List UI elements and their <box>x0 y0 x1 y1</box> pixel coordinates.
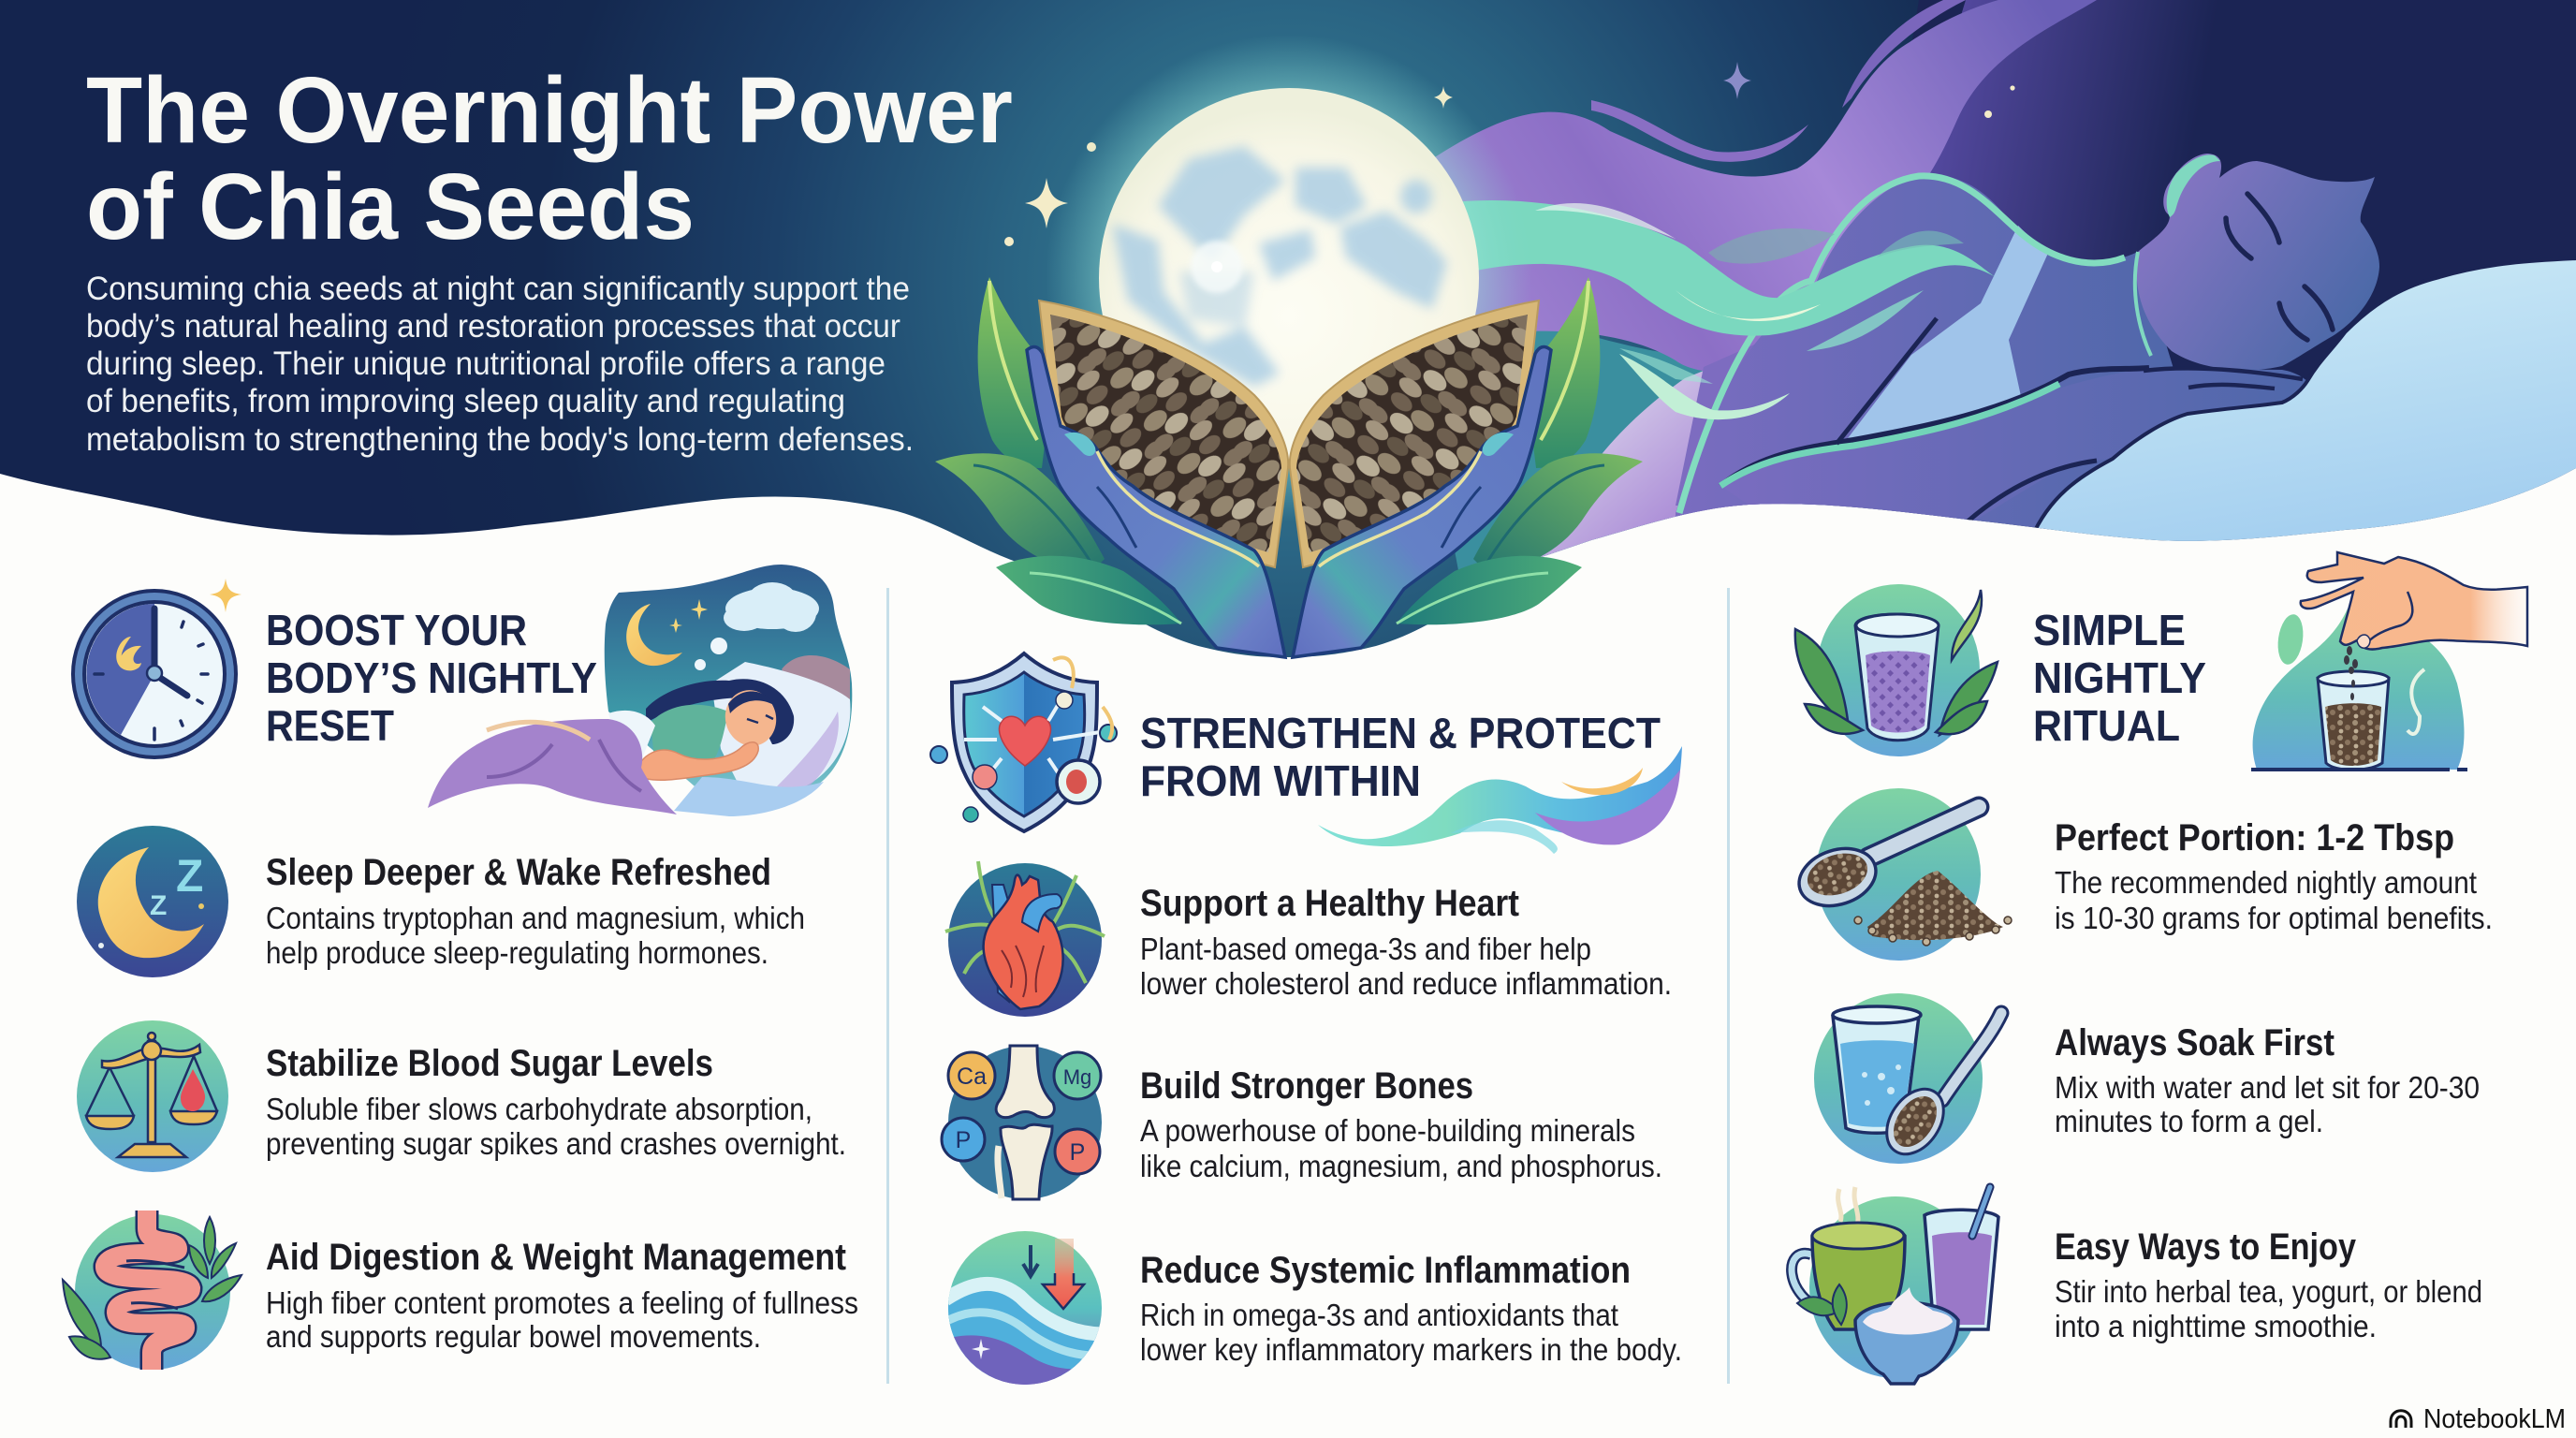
benefit: digestion <box>63 1211 858 1370</box>
decorative ribbon wave <box>1318 746 1682 854</box>
benefit: blood sugar <box>77 1020 846 1172</box>
benefit: stronger bones: Mg <box>1063 1065 1091 1089</box>
column divider left <box>886 588 889 1384</box>
step: easy ways to enjoy: Easy Ways to Enjoy <box>2055 1226 2357 1268</box>
benefit: sleep deeper: Z <box>150 890 167 921</box>
benefit: reduce inflammation: Reduce Systemic Inflammation <box>1140 1250 1631 1291</box>
icon: day night clock <box>73 579 242 757</box>
stars and dots <box>1004 62 2015 246</box>
section heading: NIGHTLY <box>2033 653 2206 702</box>
benefit: stronger bones: like calcium, magnesium, and phosphorus. <box>1140 1149 1662 1183</box>
section heading: SIMPLE <box>2033 606 2186 654</box>
step: easy ways to enjoy: Stir into herbal tea, yogurt, or blend <box>2055 1274 2482 1309</box>
column divider right <box>1727 588 1730 1384</box>
step: perfect portion: Perfect Portion: 1-2 Tbsp <box>2055 817 2454 858</box>
benefit: sleep deeper: Sleep Deeper & Wake Refreshed <box>266 852 771 893</box>
benefit: healthy heart: Support a Healthy Heart <box>1140 883 1519 924</box>
step: always soak first: Mix with water and let sit for 20-30 <box>2055 1070 2480 1105</box>
benefit: sleep deeper: help produce sleep-regulating hormones. <box>266 935 768 970</box>
panel: hero header <box>0 0 2576 665</box>
section heading: RITUAL <box>2033 701 2180 750</box>
illustration: full moon <box>1046 35 1532 521</box>
step: easy ways to enjoy <box>1792 1187 2482 1384</box>
section heading: BODY’S NIGHTLY <box>266 653 597 702</box>
benefit: sleep deeper <box>77 826 805 977</box>
intro paragraph: Consuming chia seeds at night can significantly support the <box>86 271 910 307</box>
title: of Chia Seeds <box>86 154 695 259</box>
step: always soak first <box>1814 993 2480 1165</box>
benefit: stronger bones: Ca <box>957 1064 987 1090</box>
section heading <box>2033 606 2206 750</box>
panel: simple nightly ritual <box>1792 552 2527 1384</box>
section heading: FROM WITHIN <box>1140 756 1421 805</box>
step: perfect portion <box>1792 788 2493 961</box>
section heading: STRENGTHEN & PROTECT <box>1140 709 1661 757</box>
illustration: hands holding chia seed pods <box>935 277 1643 657</box>
benefit: sleep deeper: Z <box>176 852 203 902</box>
benefit: reduce inflammation: lower key inflammatory markers in the body. <box>1140 1332 1682 1367</box>
intro paragraph <box>86 271 914 458</box>
intro paragraph: during sleep. Their unique nutritional profile offers a range <box>86 345 886 382</box>
benefit: healthy heart: Plant-based omega-3s and fiber help <box>1140 932 1591 966</box>
step: perfect portion: The recommended nightly amount <box>2055 865 2477 900</box>
panel: boost your body's nightly reset <box>63 565 858 1370</box>
icon: chia drink with leaves <box>1795 584 1998 756</box>
benefit: stronger bones: P <box>956 1127 971 1153</box>
step: easy ways to enjoy: into a nighttime smoothie. <box>2055 1309 2377 1343</box>
step: perfect portion: is 10-30 grams for optimal benefits. <box>2055 901 2493 935</box>
benefit: blood sugar: Soluble fiber slows carbohydrate absorption, <box>266 1092 812 1126</box>
logo: NotebookLM: NotebookLM <box>2423 1404 2566 1434</box>
benefit: stronger bones <box>942 1046 1662 1199</box>
intro paragraph: metabolism to strengthening the body's long-term defenses. <box>86 421 914 458</box>
illustration: woman sleeping <box>428 565 852 816</box>
title: The Overnight Power <box>86 58 1013 163</box>
benefit: stronger bones: A powerhouse of bone-building minerals <box>1140 1113 1635 1148</box>
section heading: BOOST YOUR <box>266 606 527 654</box>
left leaves, pod and hand <box>935 277 1301 657</box>
benefit: reduce inflammation <box>945 1231 1682 1390</box>
step: always soak first: minutes to form a gel. <box>2055 1104 2323 1138</box>
benefit: reduce inflammation: Rich in omega-3s and antioxidants that <box>1140 1298 1618 1332</box>
intro paragraph: body’s natural healing and restoration processes that occur <box>86 308 900 345</box>
section heading <box>1140 709 1661 805</box>
benefit: blood sugar: preventing sugar spikes and crashes overnight. <box>266 1126 846 1161</box>
benefit: digestion: Aid Digestion & Weight Management <box>266 1237 846 1278</box>
title <box>86 58 1013 259</box>
intro paragraph: of benefits, from improving sleep quality and regulating <box>86 383 845 419</box>
panel: strengthen and protect <box>930 653 1682 1390</box>
right leaves, pod and hand <box>1277 277 1643 657</box>
step: always soak first: Always Soak First <box>2055 1022 2334 1064</box>
benefit: digestion: and supports regular bowel movements. <box>266 1319 761 1354</box>
section heading <box>266 606 597 750</box>
benefit: stronger bones: P <box>1070 1139 1085 1166</box>
icon: shield with heart <box>930 653 1117 831</box>
benefit: healthy heart: lower cholesterol and reduce inflammation. <box>1140 966 1672 1001</box>
benefit: sleep deeper: Contains tryptophan and magnesium, which <box>266 901 805 935</box>
illustration: sleeping figure with flowing hair <box>1404 0 2576 580</box>
night sky wave background <box>0 0 2576 665</box>
section heading: RESET <box>266 701 394 750</box>
benefit: healthy heart <box>945 861 1672 1017</box>
illustration: hand sprinkling seeds into glass <box>2251 552 2527 771</box>
benefit: digestion: High fiber content promotes a feeling of fullness <box>266 1285 858 1320</box>
benefit: blood sugar: Stabilize Blood Sugar Levels <box>266 1043 713 1084</box>
benefit: stronger bones: Build Stronger Bones <box>1140 1065 1473 1107</box>
